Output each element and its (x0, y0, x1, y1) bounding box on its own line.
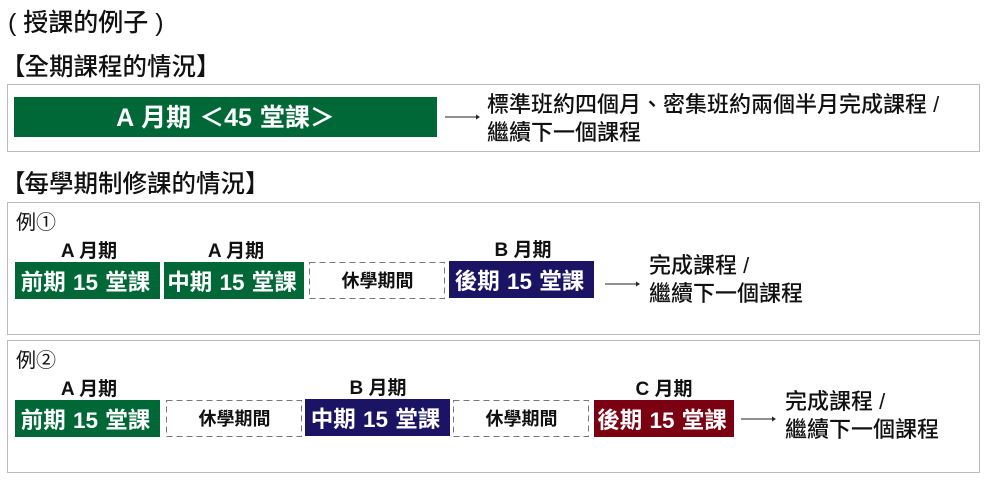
panel: example 1 (7, 202, 980, 335)
label: example 2: 例② (16, 350, 56, 372)
bar: last 15 lessons (449, 261, 594, 298)
text: completion note: 繼續下一個課程 (487, 120, 641, 144)
text: completion note (649, 253, 803, 306)
label: A term: A 月期 (208, 241, 264, 262)
bar: last 15 lessons: 後期 15 堂課 (597, 408, 727, 433)
arrow (445, 114, 480, 120)
arrow (741, 416, 776, 422)
bar: middle 15 lessons (164, 262, 304, 299)
heading: full-term course: 【全期課程的情況】 (1, 54, 220, 81)
bar: first 15 lessons: 前期 15 堂課 (21, 408, 150, 433)
bar: first 15 lessons (15, 262, 160, 299)
label: A term: A 月期 (61, 379, 117, 400)
panel: example 2 (7, 340, 980, 473)
text: completion note: 繼續下一個課程 (785, 416, 939, 442)
arrow (605, 282, 640, 286)
label: example 1: 例① (16, 212, 56, 234)
label: A term: A 月期 (61, 241, 117, 262)
panel: full-term course (7, 84, 980, 152)
label: B term: B 月期 (349, 378, 406, 399)
text: completion note: 完成課程 / (785, 389, 885, 414)
bar: last 15 lessons (594, 400, 734, 437)
bar: middle 15 lessons: 中期 15 堂課 (167, 270, 297, 295)
text: completion note (785, 389, 939, 442)
label: C term: C 月期 (635, 379, 692, 400)
label: B term: B 月期 (494, 240, 552, 261)
bar: middle 15 lessons: 中期 15 堂課 (311, 407, 440, 432)
break period: 休學期間 (198, 409, 270, 429)
break period: 休學期間 (342, 271, 414, 291)
title: ( 授課的例子 ) (8, 9, 164, 37)
text: completion note (487, 92, 940, 144)
bar: first 15 lessons: 前期 15 堂課 (21, 270, 150, 295)
break period (309, 262, 445, 299)
text: completion note: 標準班約四個月、密集班約兩個半月完成課程 / (487, 92, 939, 117)
bar: last 15 lessons: 後期 15 堂課 (455, 269, 584, 294)
break period (453, 400, 589, 437)
bar: A term 45 lessons (14, 97, 437, 137)
break period: 休學期間 (486, 409, 558, 429)
heading: per-term enrolment: 【每學期制修課的情況】 (1, 171, 270, 198)
bar: A term 45 lessons: A 月期 ＜45 堂課＞ (116, 104, 335, 132)
bar: middle 15 lessons (305, 399, 450, 436)
break period (166, 400, 302, 437)
text: completion note: 完成課程 / (649, 253, 749, 278)
text: completion note: 繼續下一個課程 (649, 280, 803, 306)
bar: first 15 lessons (15, 400, 160, 437)
